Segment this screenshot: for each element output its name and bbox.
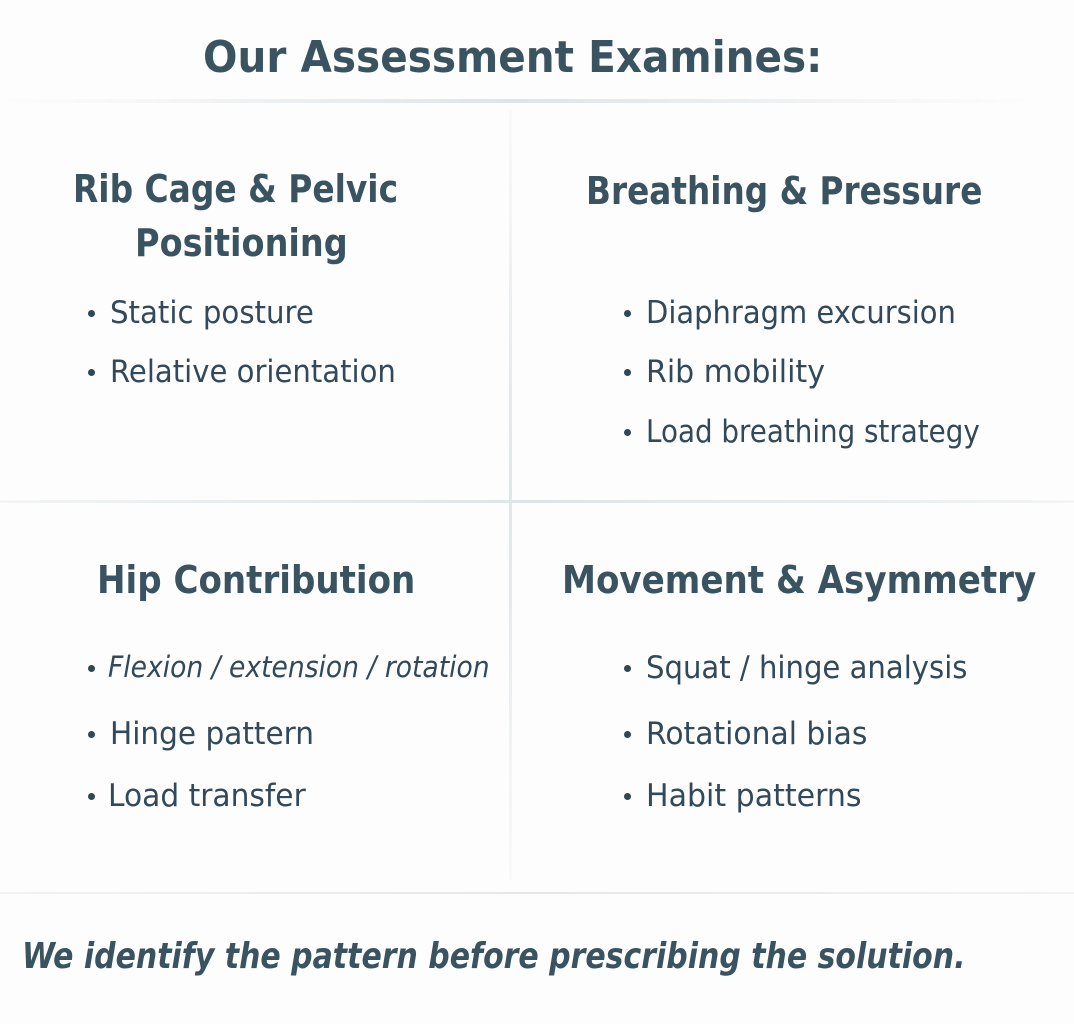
heading: rib cage: Rib Cage & Pelvic [73,167,398,211]
heading: movement: Movement & Asymmetry [562,558,1036,602]
panel: hip contribution: Load transfer [108,778,306,814]
list: rib cage items [88,295,396,390]
heading: rib cage [73,167,398,265]
list: hip items [88,650,490,814]
panel: movement and asymmetry: Squat / hinge analysis [646,650,967,686]
panel: breathing and pressure: Load breathing strategy [646,414,980,450]
panel: hip contribution [88,558,490,814]
heading: hip: Hip Contribution [97,558,415,602]
panel: breathing and pressure [586,169,982,450]
panel: rib cage and pelvic positioning [73,167,398,390]
panel: hip contribution: Hinge pattern [110,716,314,752]
panel: movement and asymmetry [562,558,1036,814]
panel: breathing and pressure: Rib mobility [646,354,825,390]
panel: breathing and pressure: Diaphragm excursion [646,295,956,331]
title: Our Assessment Examines: [203,32,822,83]
panel: movement and asymmetry: Rotational bias [646,716,867,752]
heading: breathing: Breathing & Pressure [586,169,982,213]
list: movement items [624,650,967,814]
panel: rib cage and pelvic positioning: Static posture [110,295,314,331]
heading: rib cage: Positioning [135,221,348,265]
panel: hip contribution: Flexion / extension / rotation [108,650,490,684]
list: breathing items [624,295,980,450]
panel: rib cage and pelvic positioning: Relative orientation [110,354,396,390]
closing statement: We identify the pattern before prescribing the solution. [22,936,965,977]
panel: movement and asymmetry: Habit patterns [646,778,862,814]
